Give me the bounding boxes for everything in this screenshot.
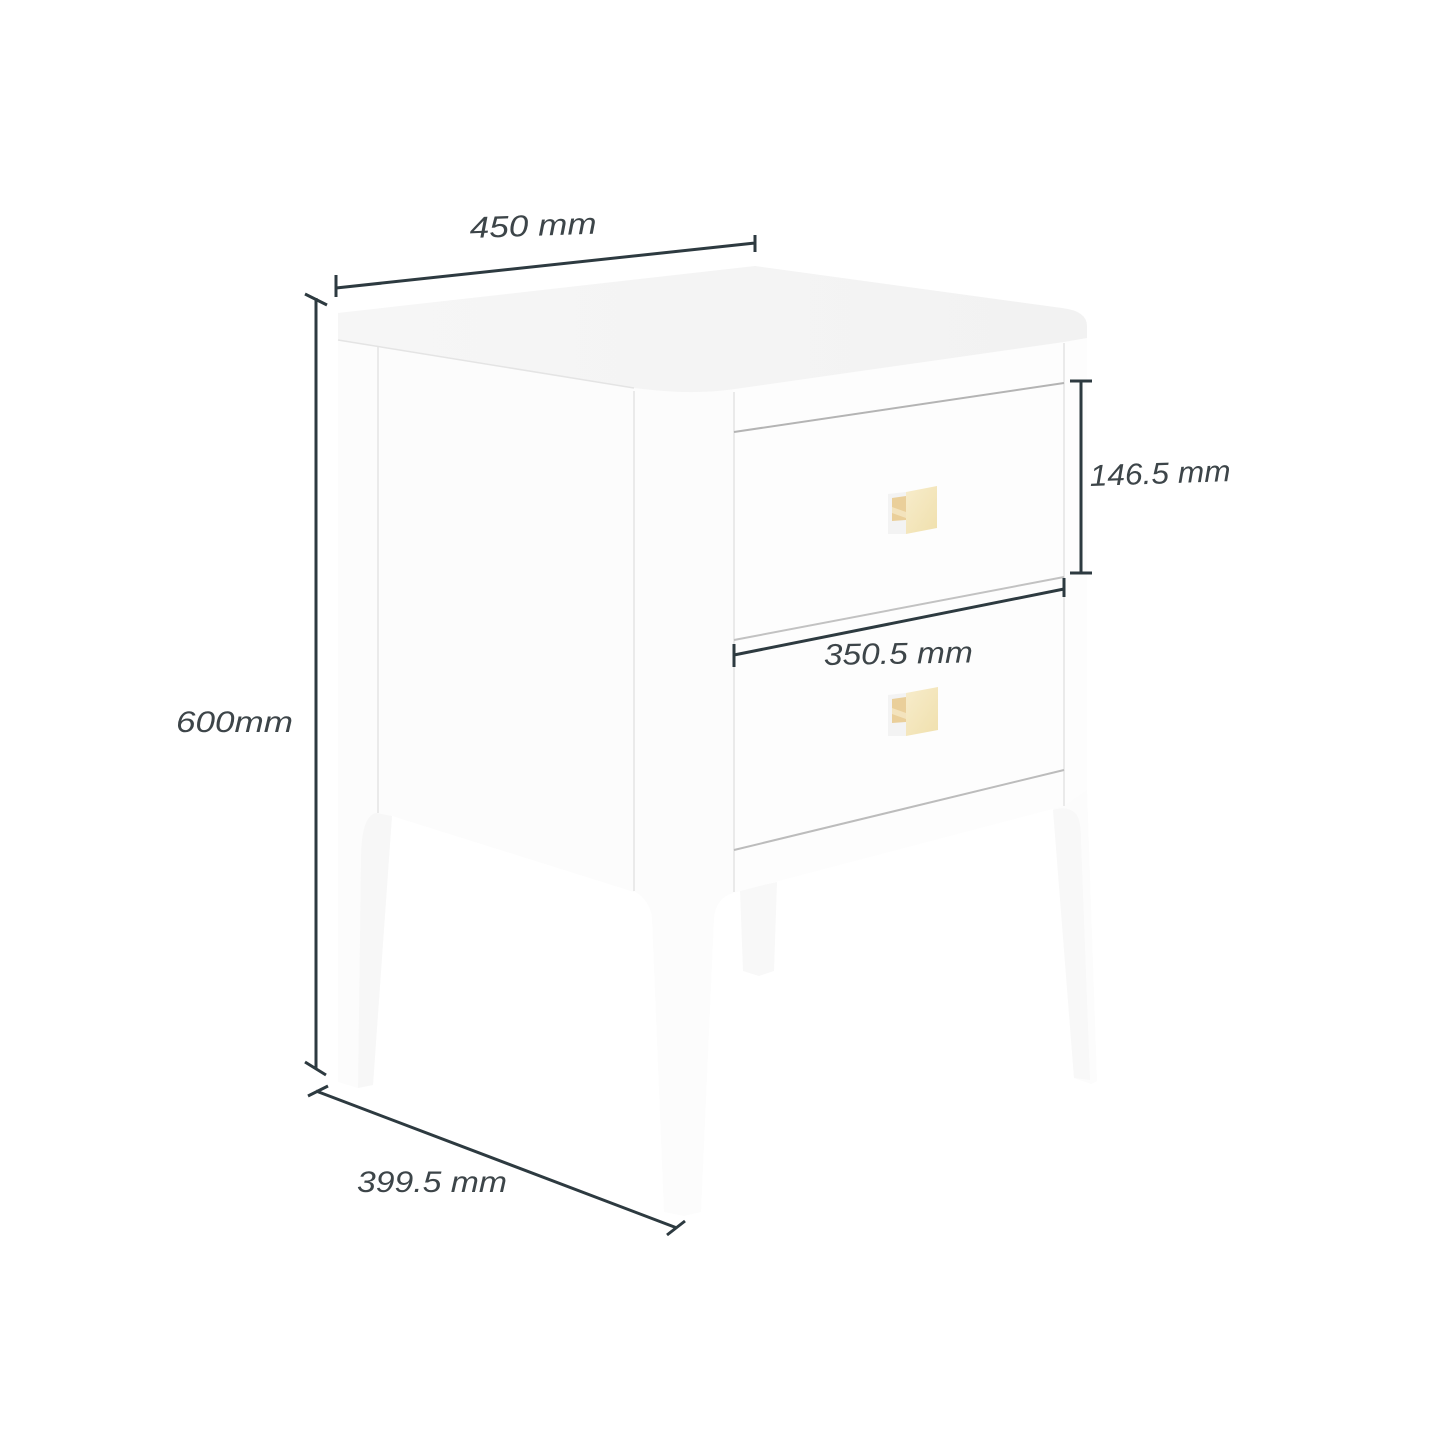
label: 146.5 mm: 146.5 mm <box>1089 455 1231 493</box>
dimension: 146.5 mm drawer height <box>1070 381 1231 573</box>
right leg <box>1053 790 1097 1084</box>
bottom drawer gap <box>734 770 1064 850</box>
dimension: 450 mm width <box>336 208 755 297</box>
label: 399.5 mm: 399.5 mm <box>357 1166 507 1199</box>
bedside table <box>338 266 1097 1216</box>
panel seams <box>338 340 1064 892</box>
label: 450 mm: 450 mm <box>469 208 597 245</box>
table top <box>338 266 1087 392</box>
label: 600mm: 600mm <box>176 706 293 739</box>
dimension: 399.5 mm depth <box>308 1086 685 1235</box>
right leg inner shadow <box>1053 808 1090 1080</box>
dimension: 600mm height <box>176 294 327 1075</box>
left leg inner shadow <box>358 813 392 1088</box>
front panel <box>733 338 1087 893</box>
dimension: 350.5 mm drawer width <box>734 578 1064 672</box>
bottom drawer handle <box>888 687 938 736</box>
left leg <box>338 800 392 1088</box>
side panel <box>338 335 634 892</box>
back leg <box>740 882 777 976</box>
top drawer gap <box>734 383 1064 432</box>
front post and front leg <box>634 388 733 1216</box>
label: 350.5 mm: 350.5 mm <box>824 636 973 672</box>
middle drawer gap <box>734 577 1064 640</box>
top drawer handle <box>888 486 937 534</box>
